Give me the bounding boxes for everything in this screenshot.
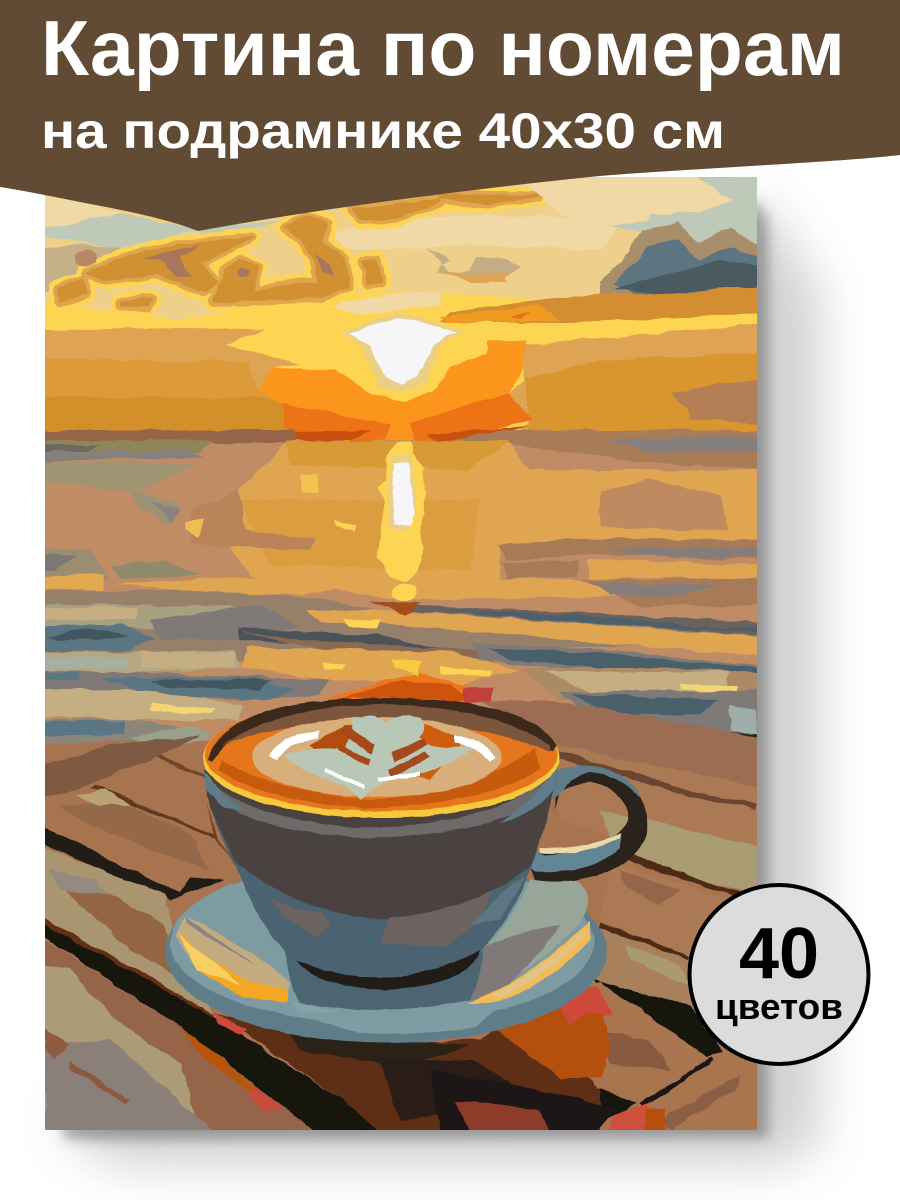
title: Картина по номерам bbox=[41, 4, 845, 92]
cool streaks bbox=[30, 590, 775, 660]
under-saucer wood bbox=[215, 1013, 600, 1140]
canvas shadow bbox=[60, 195, 820, 1165]
cup body bbox=[210, 790, 554, 976]
painting: coffee cup at sunset bbox=[30, 160, 775, 1145]
latte art heart bbox=[268, 715, 496, 800]
cup handle bbox=[527, 766, 647, 882]
right side planks bbox=[555, 745, 775, 880]
saucer bbox=[165, 859, 607, 1043]
coffee cup bbox=[203, 698, 647, 990]
yellow glints bbox=[300, 475, 317, 493]
badge: 40 colours: 40 bbox=[739, 914, 819, 994]
sea bbox=[30, 430, 775, 790]
coffee surface bbox=[203, 698, 559, 818]
wooden table bbox=[30, 735, 775, 1140]
sun reflection bbox=[377, 442, 424, 582]
badge: 40 colours: цветов bbox=[715, 986, 843, 1027]
badge: 40 colours bbox=[690, 885, 868, 1064]
orange horizon clouds bbox=[45, 327, 299, 391]
subtitle: на подрамнике 40х30 см bbox=[41, 103, 725, 159]
sky bbox=[45, 177, 757, 442]
sun glow and disc bbox=[257, 340, 533, 450]
right cloud mass bbox=[526, 177, 732, 232]
header banner bbox=[0, 0, 900, 231]
central warm water bbox=[225, 443, 775, 600]
